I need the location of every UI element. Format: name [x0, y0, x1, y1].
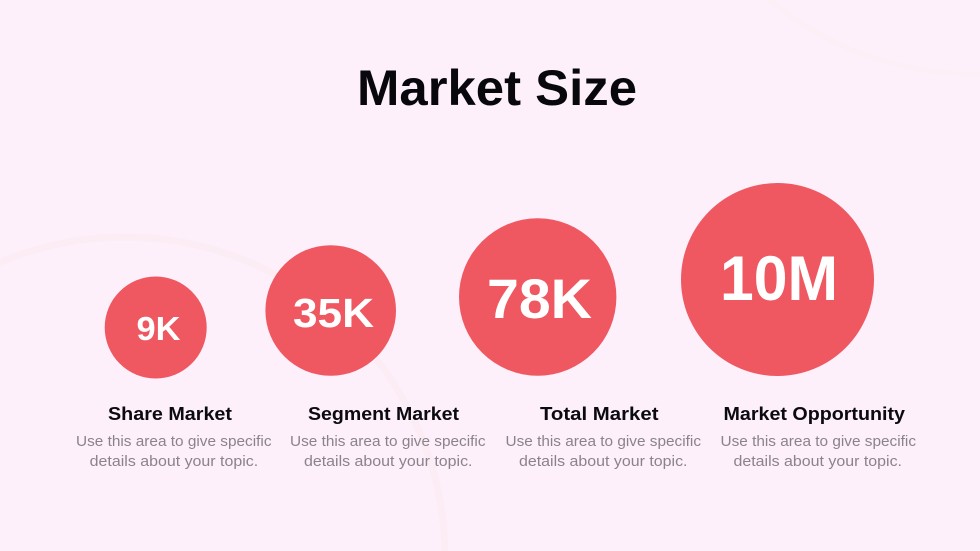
circle: 35K [265, 245, 396, 376]
description: total market: Use this area to give specific [506, 433, 702, 450]
label: share market: Share Market [108, 403, 232, 424]
panel: segment market [265, 245, 486, 470]
circle: 78K: 78K [487, 267, 592, 330]
circle: 10M: 10M [720, 244, 838, 314]
description: segment market [290, 433, 486, 470]
description: share market [76, 433, 272, 470]
circle: 78K [459, 218, 616, 376]
circle: 10M [681, 183, 874, 376]
description: segment market: details about your topic. [304, 453, 472, 470]
panel: total market [459, 218, 702, 470]
panel: share market [76, 276, 272, 470]
description: share market: details about your topic. [90, 453, 258, 470]
circle: 9K [105, 276, 207, 378]
description: total market: details about your topic. [519, 453, 688, 470]
circle: 35K: 35K [293, 290, 374, 336]
description: segment market: Use this area to give specific [290, 433, 486, 450]
description: market opportunity: details about your topic. [734, 453, 902, 470]
description: share market: Use this area to give specific [76, 433, 272, 450]
panel: market opportunity [681, 183, 917, 470]
label: market opportunity: Market Opportunity [724, 403, 906, 424]
description: total market [506, 433, 702, 470]
title: Market Size [357, 60, 637, 116]
circle: 9K: 9K [136, 310, 181, 347]
description: market opportunity: Use this area to give specific [720, 433, 917, 450]
label: total market: Total Market [540, 403, 658, 424]
description: market opportunity [720, 433, 917, 470]
label: segment market: Segment Market [308, 403, 459, 424]
